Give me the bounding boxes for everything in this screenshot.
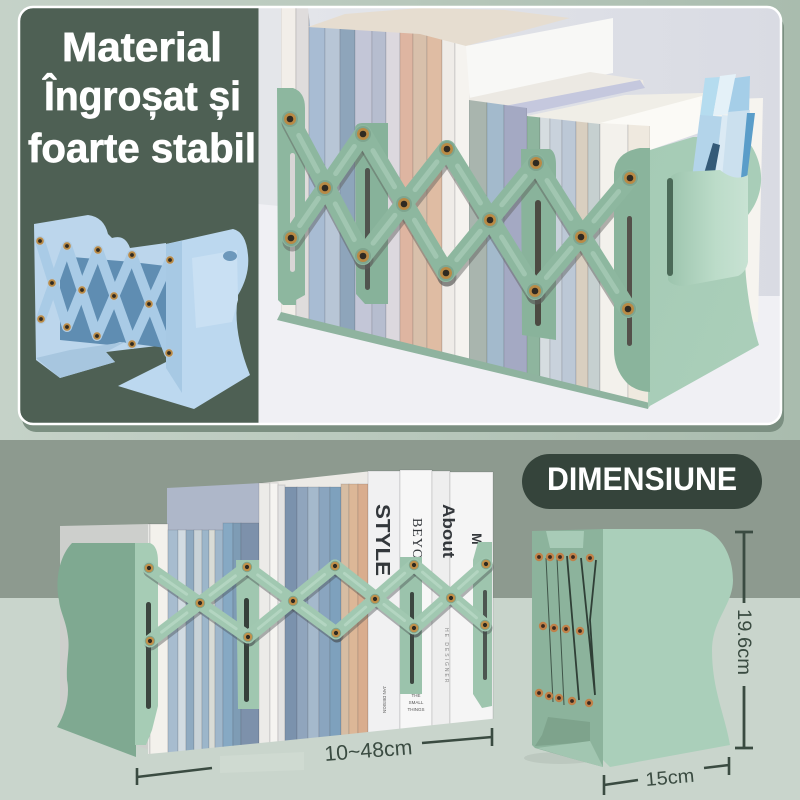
plate second slot <box>244 598 249 702</box>
main bookend side <box>648 137 761 407</box>
panel border <box>19 7 781 424</box>
heading: Material <box>62 24 222 70</box>
height label: 19.6cm <box>733 609 754 675</box>
spine titles <box>371 504 485 713</box>
panel shadow <box>22 14 784 432</box>
screws <box>282 111 638 317</box>
dimension badge <box>522 454 762 509</box>
big cover behind <box>167 483 262 530</box>
heading: foarte stabil <box>28 125 256 171</box>
side panel <box>603 529 733 767</box>
bottom section wall <box>0 440 800 598</box>
small label: the designer: HE DESIGNER <box>443 628 449 684</box>
front plate <box>135 543 158 745</box>
scissor grooves <box>149 564 486 641</box>
page background top <box>0 0 800 440</box>
scissor arms <box>149 564 486 641</box>
blue holder opening <box>223 251 237 261</box>
right plate <box>473 542 492 708</box>
front plate slot <box>627 216 632 346</box>
green side panel <box>57 543 136 757</box>
pens <box>692 74 755 178</box>
heading: Îngroșat și <box>42 73 241 119</box>
photo wall and table <box>20 8 780 423</box>
small label: jan design: JAN DESIGN <box>382 686 387 713</box>
width dimension arrow <box>137 728 492 785</box>
folded front <box>532 529 603 767</box>
back bookend grey edge <box>60 524 150 750</box>
depth dimension arrow <box>604 757 729 795</box>
retouch patch <box>220 752 304 773</box>
books: middle group <box>469 90 527 390</box>
blue front bookend <box>118 229 250 409</box>
right plate slot <box>483 590 487 680</box>
book behind the holder <box>714 98 763 296</box>
books: top pages and white cover <box>308 8 645 114</box>
books: right group <box>527 110 650 410</box>
plate third slot <box>410 592 414 684</box>
height dimension arrow <box>735 532 753 748</box>
ground shadow <box>524 752 596 764</box>
plate slot <box>146 602 151 709</box>
screws <box>144 559 491 646</box>
plate second <box>236 560 259 709</box>
bottom left product <box>57 470 494 757</box>
width label: 10~48cm <box>324 736 413 766</box>
scissor shadow <box>150 567 487 644</box>
plate second <box>355 123 388 304</box>
badge text: DIMENSIUNE <box>547 461 737 497</box>
books: left group <box>281 8 470 355</box>
top panel: product photo <box>20 0 780 423</box>
blue base <box>36 342 125 378</box>
books: right group page tops <box>527 93 703 124</box>
bookend plates <box>277 88 556 340</box>
right product: bookend side view <box>524 529 733 767</box>
heading <box>28 31 254 163</box>
blue screws <box>35 236 175 358</box>
left dark panel <box>20 8 258 423</box>
blue pen holder <box>192 250 238 328</box>
folded screws <box>535 553 594 707</box>
small label: the small things: THE <box>412 693 420 698</box>
main bookend front plate <box>614 148 650 392</box>
title: STYLE: STYLE <box>371 504 393 576</box>
scissor arms <box>290 119 630 309</box>
depth label: 15cm <box>645 766 695 791</box>
pen holder <box>668 170 748 286</box>
small label: the small things second line: SMALL <box>409 700 424 705</box>
upper inner back <box>546 531 584 548</box>
bottom section table <box>0 598 800 800</box>
title: BEYO: BEYO <box>409 518 424 560</box>
plate third <box>521 149 556 340</box>
blue back section <box>34 215 166 378</box>
scissor arm shadow <box>291 123 631 313</box>
icon: blue expandable bookend <box>34 215 250 409</box>
books: white top face <box>600 96 702 150</box>
blue gaps <box>60 256 166 348</box>
small label: the small things third line: THINGS <box>407 707 425 712</box>
plate third <box>400 557 422 694</box>
scissor arm grooves <box>296 133 621 294</box>
blue arms <box>40 241 170 353</box>
pen holder dark edge <box>667 178 673 276</box>
inner dark area <box>535 717 590 746</box>
blue front plate <box>166 241 182 393</box>
title: M: M <box>469 533 485 545</box>
plate left <box>277 88 305 305</box>
floor <box>537 741 603 767</box>
title: About: About <box>439 504 458 558</box>
bookend base <box>277 312 650 409</box>
book spines <box>148 470 494 754</box>
folded dark lines <box>546 556 596 705</box>
